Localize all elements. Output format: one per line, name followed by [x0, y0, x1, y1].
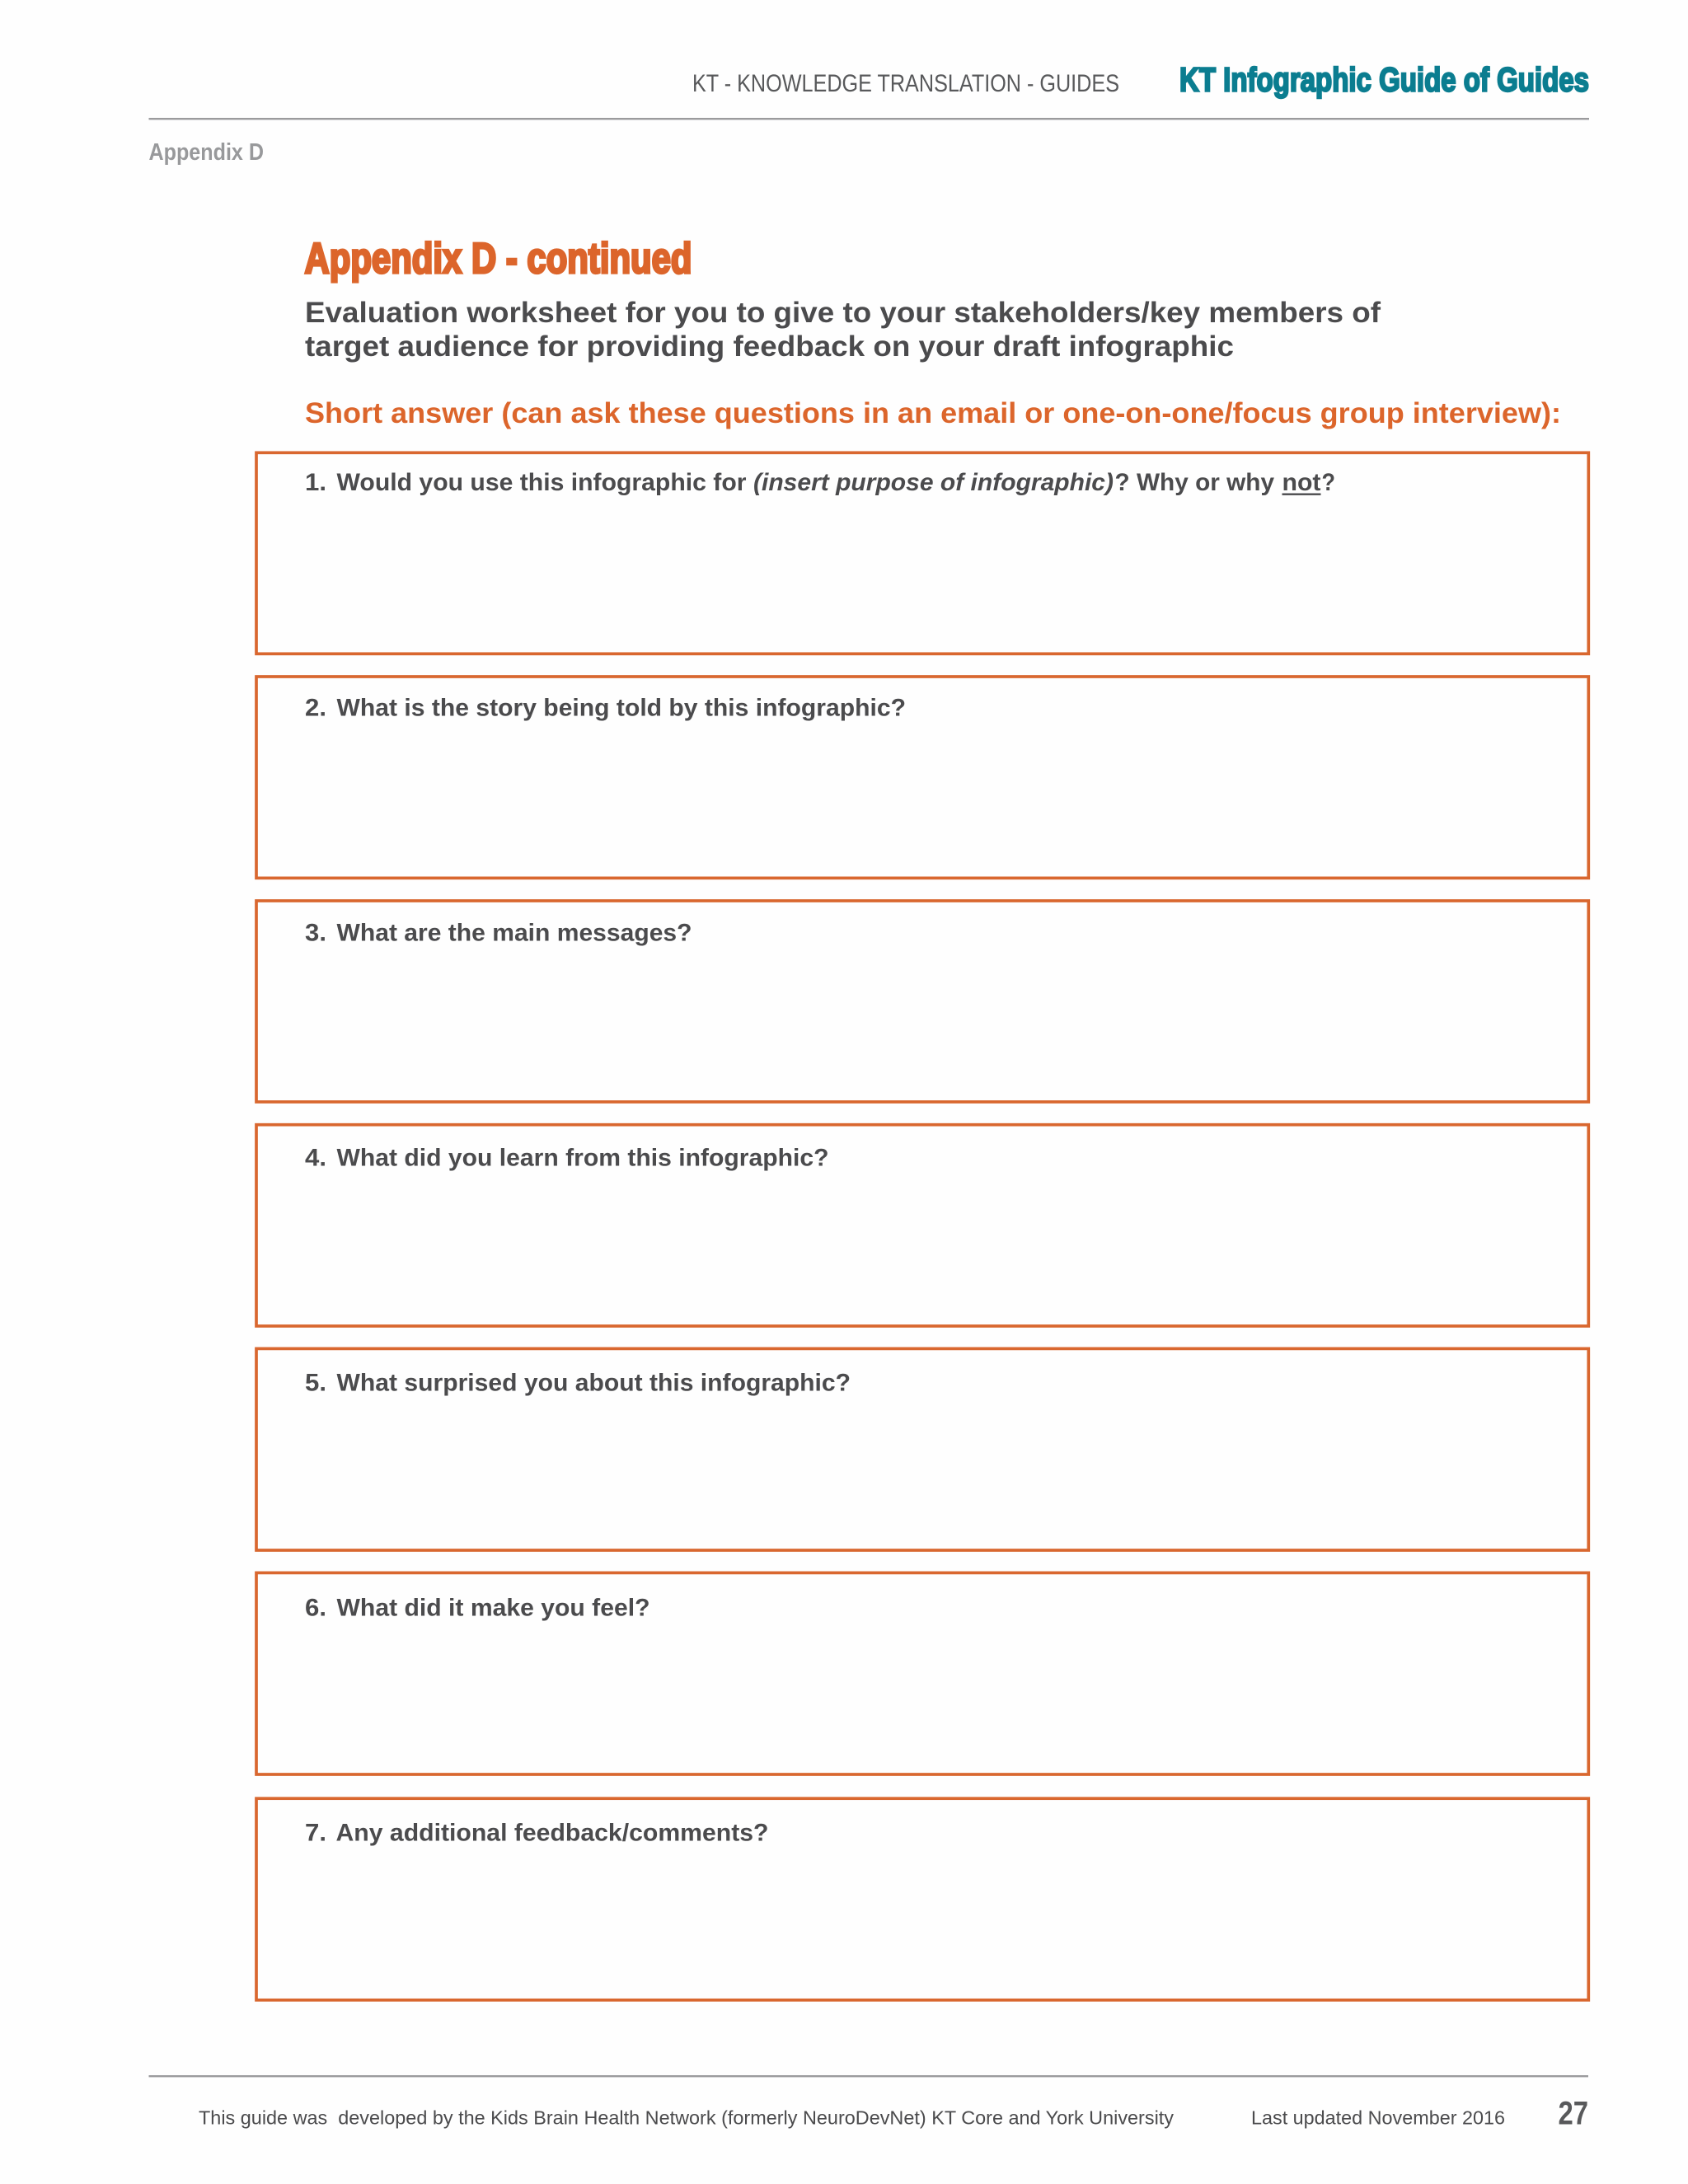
question 1 text: ?: [1322, 469, 1335, 496]
guide title: KT Infographic Guide of Guides: [1179, 61, 1589, 99]
question 1 text: Would you use this infographic for: [336, 469, 747, 496]
page number: 27: [1558, 2095, 1588, 2131]
question 3 text: 3.: [305, 919, 326, 946]
question 3 text: What are the main messages?: [336, 919, 692, 946]
worksheet description: Evaluation worksheet for you to give to your stakeholders/key members of: [305, 297, 1381, 329]
question 6 text: 6.: [305, 1595, 326, 1622]
panel: question 7: [256, 1798, 1588, 2000]
panel: question 1: [256, 452, 1588, 654]
section label: Appendix D: [148, 139, 264, 166]
question 2 text: 2.: [305, 694, 326, 721]
panel: question 4: [256, 1125, 1588, 1326]
question 5 text: What surprised you about this infographic?: [336, 1369, 851, 1396]
last updated date: Last updated November 2016: [1251, 2107, 1505, 2128]
running header text: KT - KNOWLEDGE TRANSLATION - GUIDES: [692, 70, 1119, 97]
panel: question 6: [256, 1572, 1588, 1774]
question 4 text: 4.: [305, 1144, 326, 1171]
worksheet description: [305, 297, 1381, 363]
header bar: [148, 61, 1589, 120]
question 5 text: 5.: [305, 1369, 326, 1396]
footer: [148, 2075, 1588, 2131]
panel: question 5: [256, 1348, 1588, 1550]
short answer instruction: Short answer (can ask these questions in an email or one-on-one/focus group interview):: [305, 397, 1561, 429]
question 6 text: What did it make you feel?: [336, 1595, 649, 1622]
question 1 text: [305, 469, 1335, 496]
panel: question 2: [256, 677, 1588, 878]
page heading: Appendix D - continued: [305, 234, 692, 282]
question 7 text: Any additional feedback/comments?: [336, 1820, 768, 1847]
question 7 text: 7.: [305, 1820, 326, 1847]
question 1 text: 1.: [305, 469, 326, 496]
question 1 text: not: [1282, 469, 1321, 496]
question 4 text: What did you learn from this infographic?: [336, 1144, 829, 1171]
question 1 text: (insert purpose of infographic): [753, 469, 1114, 496]
worksheet description: target audience for providing feedback on your draft infographic: [305, 330, 1234, 363]
question 1 text: ? Why or why: [1114, 469, 1274, 496]
question 2 text: What is the story being told by this infographic?: [336, 694, 906, 721]
footer credit: This guide was developed by the Kids Brain Health Network (formerly NeuroDevNet) KT Core and York University: [199, 2107, 1174, 2128]
panel: question 3: [256, 901, 1588, 1102]
